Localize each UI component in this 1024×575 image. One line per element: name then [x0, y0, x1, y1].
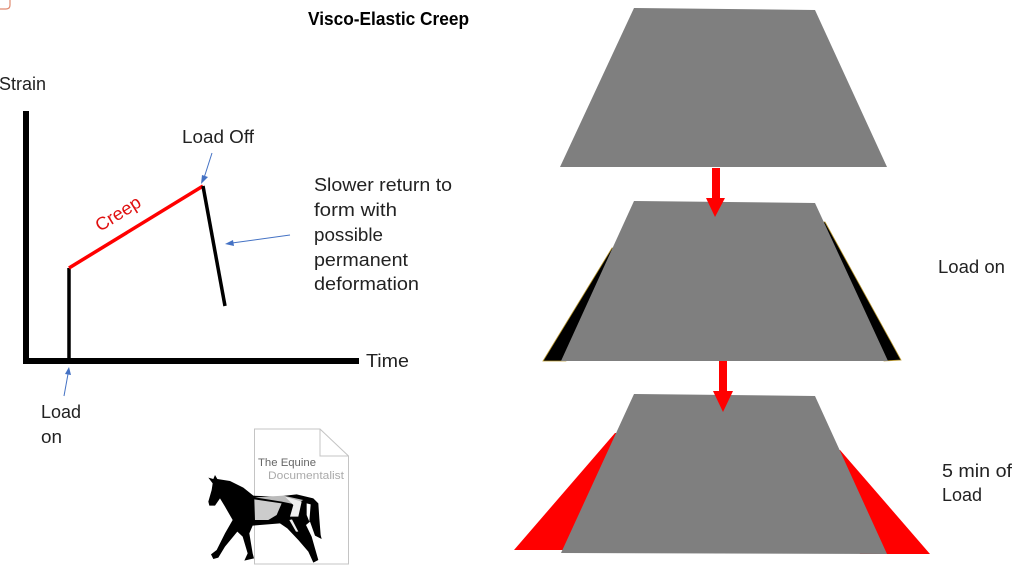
bottom gray trapezoid [561, 394, 887, 554]
load on side label: Load on [938, 257, 1005, 277]
corner mark [0, 0, 10, 9]
load on label: on [41, 427, 62, 447]
slower return text block: possible [314, 225, 383, 245]
x axis [23, 358, 359, 364]
arrow: load applied 1 [706, 168, 725, 217]
left red bulge [514, 433, 640, 550]
y axis label: Strain [0, 74, 46, 94]
logo: wordmark [258, 457, 344, 482]
right black bulge [800, 222, 901, 361]
logo: The Equine Documentalist [208, 429, 348, 564]
top trapezoid: unloaded [560, 8, 887, 167]
slower return text block: permanent [314, 250, 408, 270]
slower return text block: form with [314, 200, 397, 220]
creep line [69, 186, 203, 268]
load on label: Load [41, 402, 81, 422]
y axis [23, 111, 29, 363]
load on label [41, 402, 81, 447]
arrow: load applied 2 [713, 361, 733, 412]
arrow: slower return [225, 235, 290, 246]
slower return text block: deformation [314, 274, 419, 294]
bottom trapezoid: 5 min of load [514, 394, 930, 554]
title: Visco-Elastic Creep [308, 9, 469, 29]
strain-time chart [0, 74, 409, 447]
five minutes of load label [942, 461, 1013, 505]
x axis label: Time [366, 351, 409, 371]
slower return text block [314, 175, 452, 294]
five minutes of load label: 5 min of [942, 461, 1013, 481]
load off label: Load Off [182, 127, 255, 147]
arrow: load on [64, 367, 71, 396]
load on line [67, 268, 71, 359]
right red bulge [800, 450, 930, 554]
logo: wordmark: The Equine [258, 457, 316, 469]
logo: wordmark: Documentalist [268, 470, 344, 482]
creep label: Creep [92, 192, 145, 235]
arrow: load off [201, 153, 212, 184]
logo: horse silhouette [208, 475, 322, 563]
logo: document page [254, 429, 348, 564]
left black bulge [543, 248, 640, 361]
five minutes of load label: Load [942, 485, 982, 505]
middle gray trapezoid [561, 201, 888, 361]
recovery line [203, 186, 225, 306]
slower return text block: Slower return to [314, 175, 452, 195]
middle trapezoid: load on [543, 201, 901, 361]
